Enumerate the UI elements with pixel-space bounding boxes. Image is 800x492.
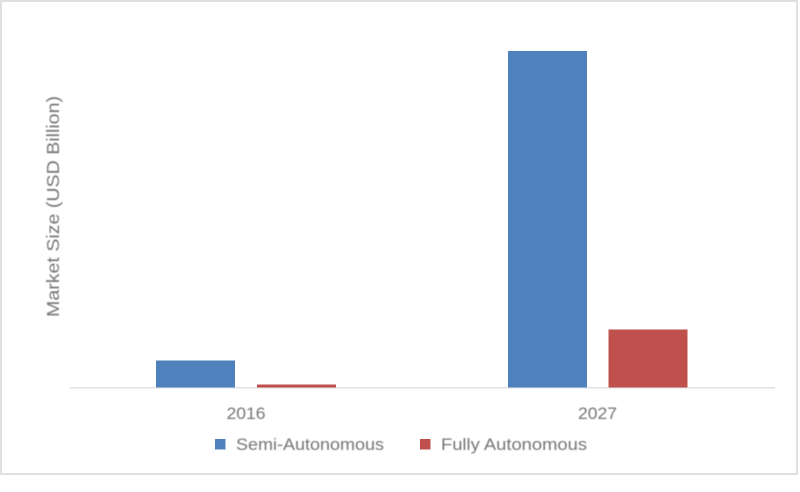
legend label: Semi-Autonomous: Semi-Autonomous bbox=[236, 436, 384, 454]
bar: 2016 Fully Autonomous bbox=[257, 384, 336, 388]
bar: 2016 Semi-Autonomous bbox=[156, 360, 235, 388]
label: 2027: 2027 bbox=[578, 405, 617, 423]
legend swatch: Semi-Autonomous bbox=[215, 439, 226, 450]
x-axis baseline bbox=[70, 387, 775, 388]
label: 2016: 2016 bbox=[226, 405, 266, 423]
bar: 2027 Semi-Autonomous bbox=[508, 51, 587, 388]
bar: 2027 Fully Autonomous bbox=[608, 330, 688, 388]
legend label: Fully Autonomous: Fully Autonomous bbox=[441, 436, 587, 454]
y-axis title: Market Size (USD Billion) bbox=[43, 96, 63, 317]
group: 2016 bbox=[156, 360, 336, 423]
legend bbox=[215, 436, 587, 454]
group: 2027 bbox=[508, 51, 688, 423]
legend swatch: Fully Autonomous bbox=[420, 439, 430, 450]
